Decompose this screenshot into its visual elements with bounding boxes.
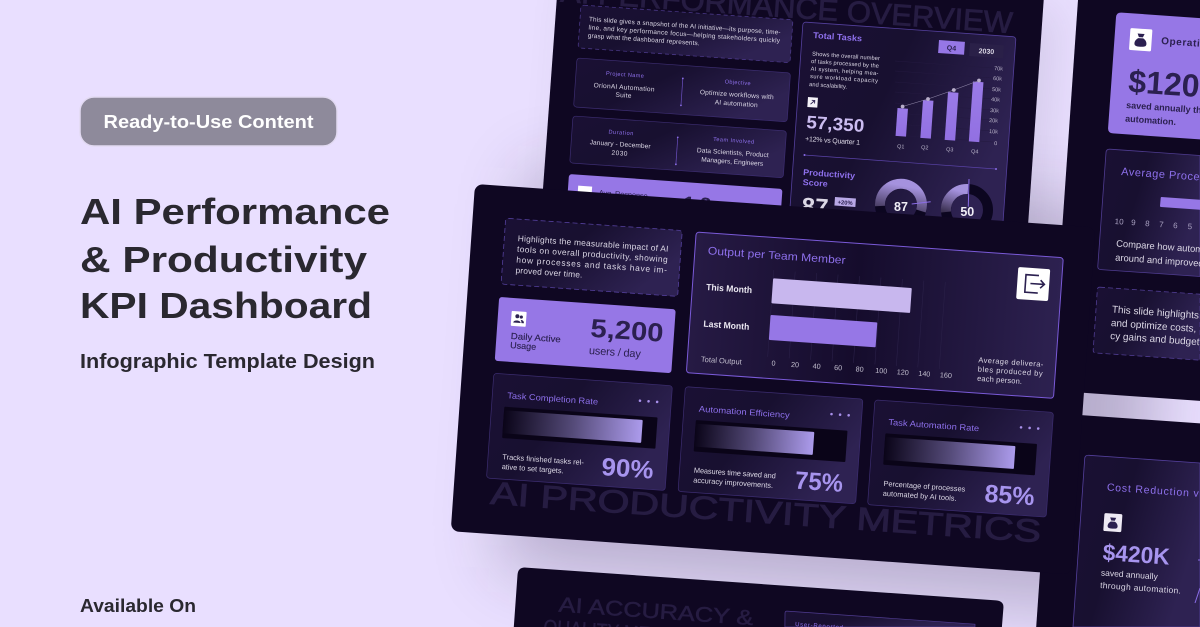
productivity score value: +20% [837, 200, 853, 207]
axis labels: 60 [834, 363, 842, 372]
axis labels: 120 [897, 367, 909, 377]
note text [1110, 305, 1200, 348]
duration and team involved: Managers, Engineers [701, 157, 764, 168]
total tasks value: 57,350 [806, 112, 865, 136]
bar chart: tasks per quarter: Q4 [971, 149, 979, 156]
KPI label [510, 331, 561, 354]
intro note [578, 5, 793, 63]
icon: money bag [1129, 28, 1152, 51]
watermark heading: AI ACCURACY & [558, 594, 754, 627]
quarter tabs: 2030 [978, 48, 995, 56]
bar: this month [705, 274, 912, 313]
axis labels: 100 [875, 366, 888, 376]
savings value: $420K [1102, 539, 1171, 570]
intro note [501, 218, 682, 296]
duration and team involved: 2030 [611, 150, 628, 158]
card: task completion rate: Tracks finished tasks rel- [502, 452, 585, 467]
average processing time card [1098, 149, 1200, 276]
savings description: saved annually [1101, 568, 1159, 582]
bar chart: tasks per quarter: 70k [994, 66, 1003, 73]
axis numbers: 8 [1145, 219, 1150, 228]
donut chart: 50: 50 [960, 205, 974, 219]
intro note: line, and key performance focus—helping stakeholders quickly [588, 24, 781, 45]
axis numbers: 9 [1131, 218, 1136, 227]
KPI card: daily active usage [495, 297, 676, 373]
donut chart: 50 [946, 179, 988, 231]
card: task automation rate: 85% [984, 480, 1035, 511]
bar chart: tasks per quarter: 60k [993, 76, 1002, 83]
duration and team involved: Duration [608, 130, 634, 137]
savings description: automation. [1125, 114, 1176, 127]
total tasks panel [788, 22, 1016, 251]
operational savings card [1108, 13, 1200, 139]
note text: and optimize costs, [1110, 318, 1197, 335]
card heading: Cost Reduction v [1106, 482, 1200, 500]
main title [80, 191, 390, 326]
card: task automation rate: automated by AI tools. [883, 489, 957, 503]
panel description: each person. [977, 374, 1022, 386]
total tasks description: and scalability. [809, 82, 848, 91]
bar: last month: Last Month [703, 319, 750, 332]
bar chart: tasks per quarter: Q1 [897, 144, 905, 151]
quarter tabs: Q4 [947, 45, 956, 53]
project name and objective [574, 58, 790, 122]
avg response card: Avg. Response [598, 188, 648, 201]
slide: performance overview [540, 0, 1044, 251]
grid lines [768, 270, 945, 369]
subtitle: Infographic Template Design [80, 351, 375, 373]
panel heading: Output per Team Member [707, 245, 846, 267]
axis numbers: 10 [1114, 217, 1124, 227]
intro note: Highlights the measurable impact of AI [517, 233, 669, 254]
bar chart: tasks per quarter: 40k [991, 97, 1000, 104]
axis labels: 0 [771, 359, 776, 368]
avg response card: 1.8s [682, 193, 723, 218]
KPI unit: users / day [589, 345, 642, 361]
card: automation efficiency: Measures time saved and [694, 466, 776, 480]
KPI label: Usage [510, 340, 537, 352]
bar: this month: This Month [706, 282, 752, 295]
panel description: bles produced by [978, 365, 1043, 378]
card: task automation rate: Task Automation Rate [888, 417, 980, 433]
duration and team involved: Data Scientists, Product [697, 147, 769, 159]
pill badge: Ready-to-Use Content: Ready-to-Use Content [104, 112, 314, 132]
intro note: how processes and tasks have im- [516, 254, 668, 275]
card description [1115, 238, 1200, 269]
panel: output per team member [686, 232, 1063, 398]
panel description: Average delivera- [978, 355, 1044, 369]
card: automation efficiency [678, 387, 863, 504]
productivity score heading [802, 167, 856, 189]
project name and objective: AI automation [714, 99, 758, 109]
bar chart: tasks per quarter: 0 [994, 141, 997, 147]
savings description [1100, 568, 1181, 596]
total tasks heading: Total Tasks [813, 30, 863, 43]
note text: This slide highlights [1111, 305, 1199, 322]
divider [804, 154, 997, 170]
pill badge: Ready-to-Use Content [80, 97, 337, 146]
card: task completion rate: Task Completion Rate [507, 390, 599, 407]
axis labels [771, 359, 952, 380]
savings description [1125, 100, 1200, 127]
shadow: main slide [500, 170, 1166, 614]
panel description [977, 355, 1044, 387]
quarter tabs [938, 40, 1004, 58]
savings description: through automation. [1100, 580, 1181, 596]
card: task automation rate: Percentage of processes [883, 479, 966, 494]
axis title: Total Output [701, 355, 743, 367]
total tasks description: AI system, helping mea- [810, 67, 879, 77]
KPI value: 5,200 [590, 313, 665, 348]
duration and team involved: Team Involved [713, 137, 754, 146]
slide: cost overview [1051, 0, 1200, 401]
icon: money bag [1103, 513, 1122, 532]
avg response card [566, 174, 782, 233]
user-reported panel [785, 611, 975, 627]
card: automation efficiency: Automation Efficiency [699, 404, 791, 420]
slide: AI productivity metrics [451, 184, 1095, 575]
watermark heading: AI PRODUCTIVITY METRICS [489, 475, 1042, 549]
card: automation efficiency: accuracy improvements. [693, 475, 773, 490]
intro note: proved over time. [515, 265, 583, 280]
donut chart: 87: 87 [894, 200, 908, 214]
axis labels: 160 [940, 370, 952, 380]
main title: & Productivity [80, 239, 367, 280]
bar chart: tasks per quarter: Q2 [921, 145, 929, 152]
total tasks description: of tasks processed by the [811, 59, 879, 70]
KPI label: Daily Active [511, 331, 561, 344]
project name and objective: Optimize workflows with [700, 89, 774, 101]
intro note: This slide gives a snapshot of the AI initiative—its purpose, time- [589, 16, 781, 36]
card: automation efficiency: 75% [794, 467, 844, 498]
note text: cy gains and budget [1110, 331, 1200, 348]
productivity score heading: Score [802, 177, 828, 189]
bar chart: tasks per quarter [895, 61, 1003, 156]
axis labels: 20 [791, 360, 799, 369]
icon: export [1016, 267, 1050, 301]
intro note: grasp what the dashboard represents. [588, 33, 700, 47]
axis numbers: 7 [1159, 220, 1164, 229]
total tasks description [809, 52, 880, 91]
available on label: Available On [80, 596, 196, 616]
project name and objective: Project Name [606, 71, 644, 80]
axis numbers: 6 [1173, 221, 1178, 230]
axis numbers [1114, 217, 1193, 231]
bar chart: tasks per quarter: 20k [989, 118, 998, 125]
productivity score value [801, 193, 856, 222]
icon: people [511, 311, 527, 327]
productivity score value: 87 [801, 193, 829, 222]
intro note: tools on overall productivity, showing [517, 244, 668, 264]
processing bar [1160, 197, 1200, 210]
axis numbers: 5 [1187, 222, 1193, 231]
project name and objective: OrionAI Automation [593, 82, 655, 93]
change vs quarter 1: +12% vs Quarter 1 [805, 136, 860, 147]
cost reduction card [1073, 455, 1200, 627]
card: task completion rate [487, 373, 672, 491]
shadow: back slides [554, 0, 1059, 308]
axis labels: 40 [812, 361, 821, 371]
axis labels: 140 [918, 369, 931, 379]
card: task automation rate [868, 400, 1053, 517]
duration and team involved: January - December [589, 139, 652, 151]
bar: last month [703, 310, 877, 347]
icon: trend arrow [807, 97, 818, 108]
bar chart: tasks per quarter: 30k [990, 108, 999, 115]
total tasks description: sure workload capacity [810, 74, 878, 85]
total tasks description: Shows the overall number [812, 52, 880, 62]
productivity score heading: Productivity [803, 167, 856, 181]
note box [1093, 287, 1200, 360]
card: task completion rate: ative to set targets. [501, 462, 564, 475]
donut chart: 87 [880, 184, 931, 226]
axis labels: 80 [855, 364, 864, 374]
main title: AI Performance [80, 191, 390, 232]
main title: KPI Dashboard [80, 285, 372, 326]
duration and team involved [570, 116, 786, 178]
chart fragment [1195, 560, 1200, 603]
bar chart: tasks per quarter: 50k [992, 87, 1001, 94]
slide: AI accuracy and quality [514, 568, 1003, 627]
slide: cost reduction [1036, 413, 1200, 627]
project name and objective: Objective [724, 79, 751, 87]
bar chart: tasks per quarter: 10k [989, 129, 998, 136]
project name and objective: Suite [615, 92, 632, 100]
bar chart: tasks per quarter: Q3 [946, 147, 954, 154]
card: task completion rate: 90% [601, 453, 654, 485]
